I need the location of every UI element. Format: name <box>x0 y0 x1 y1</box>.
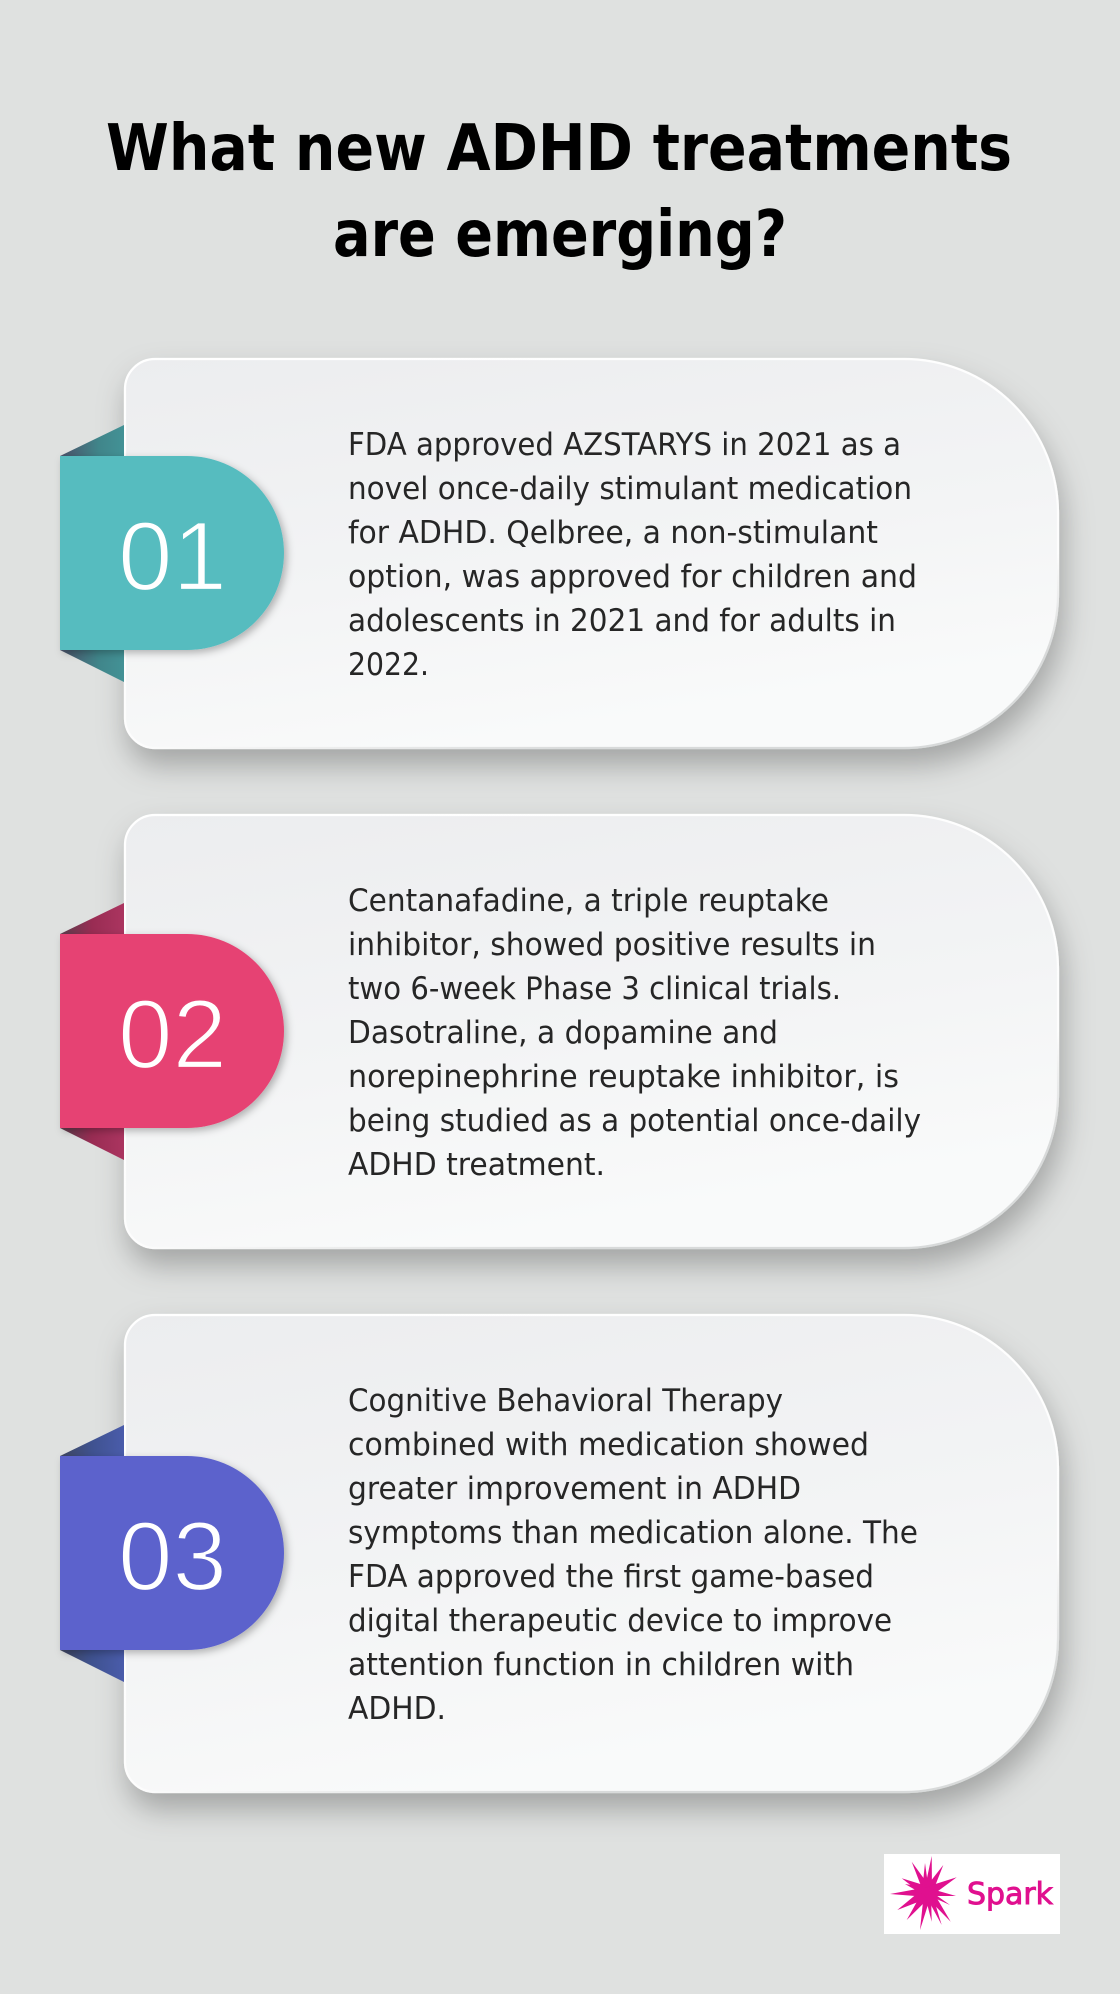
ribbon fold bottom 3 <box>60 1650 124 1682</box>
wordmark: Spark <box>967 1877 1054 1912</box>
ribbon fold bottom 2 <box>60 1128 124 1160</box>
text block 1 <box>348 427 917 683</box>
text block 1: novel once-daily stimulant medication <box>348 471 912 507</box>
number badge 2: 02 <box>118 979 227 1089</box>
title <box>106 112 1012 272</box>
text block 2: ADHD treatment. <box>348 1147 605 1183</box>
text block 2: Centanafadine, a triple reuptake <box>348 883 829 919</box>
text block 3: digital therapeutic device to improve <box>348 1603 892 1639</box>
title: are emerging? <box>333 198 787 272</box>
text block 3: Cognitive Behavioral Therapy <box>348 1383 783 1419</box>
ribbon fold top 1 <box>60 425 124 456</box>
text block 3: combined with medication showed <box>348 1427 869 1463</box>
text block 3: symptoms than medication alone. The <box>348 1515 918 1551</box>
text block 1: FDA approved AZSTARYS in 2021 as a <box>348 427 901 463</box>
panel: step 3 <box>60 1315 1058 1792</box>
text block 1: adolescents in 2021 and for adults in <box>348 603 896 639</box>
text block 3: attention function in children with <box>348 1647 854 1683</box>
number badge 3 <box>60 1456 284 1650</box>
text block 3: FDA approved the first game-based <box>348 1559 874 1595</box>
panel: step 1 <box>60 359 1058 748</box>
number badge 3: 03 <box>118 1501 227 1611</box>
card background 3 <box>125 1315 1058 1792</box>
icon: starburst <box>890 1856 957 1930</box>
text block 1: 2022. <box>348 647 429 683</box>
text block 3: ADHD. <box>348 1691 446 1727</box>
text block 1: option, was approved for children and <box>348 559 917 595</box>
ribbon fold top 3 <box>60 1425 124 1456</box>
text block 2: two 6-week Phase 3 clinical trials. <box>348 971 841 1007</box>
text block 2: norepinephrine reuptake inhibitor, is <box>348 1059 899 1095</box>
text block 2: inhibitor, showed positive results in <box>348 927 876 963</box>
text block 2: Dasotraline, a dopamine and <box>348 1015 778 1051</box>
title: What new ADHD treatments <box>106 112 1012 186</box>
text block 2 <box>348 883 921 1183</box>
logo: Spark <box>884 1854 1060 1934</box>
card background 2 <box>125 815 1058 1248</box>
ribbon fold bottom 1 <box>60 650 124 682</box>
number badge 1 <box>60 456 284 650</box>
text block 3 <box>348 1383 918 1727</box>
card background 1 <box>125 359 1058 748</box>
number badge 2 <box>60 934 284 1128</box>
text block 1: for ADHD. Qelbree, a non-stimulant <box>348 515 878 551</box>
ribbon fold top 2 <box>60 903 124 934</box>
text block 2: being studied as a potential once-daily <box>348 1103 921 1139</box>
text block 3: greater improvement in ADHD <box>348 1471 801 1507</box>
number badge 1: 01 <box>118 501 227 611</box>
panel: step 2 <box>60 815 1058 1248</box>
